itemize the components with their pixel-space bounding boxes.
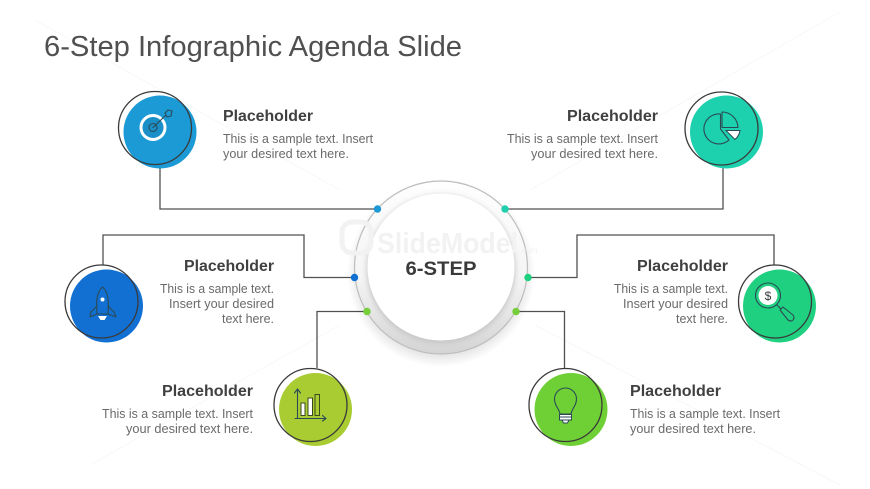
- text block: Placeholder: [184, 258, 274, 275]
- text block: Placeholder: [630, 383, 721, 400]
- text block: This is a sample text. Insert: [630, 406, 780, 421]
- center label: 6-STEP: [406, 258, 476, 280]
- text block: [507, 108, 658, 161]
- icon: pie chart: [685, 92, 763, 168]
- icon: magnifier: $: [765, 289, 772, 303]
- text block: This is a sample text.: [160, 281, 274, 296]
- icon: rocket: [65, 265, 143, 342]
- text block: Placeholder: [637, 258, 728, 275]
- step 3: rocket: [65, 258, 274, 342]
- text block: [630, 383, 780, 436]
- text block: Placeholder: [567, 108, 658, 125]
- text block: Placeholder: [223, 108, 313, 125]
- watermark: [342, 222, 538, 260]
- watermark: SlideModel: [377, 228, 518, 260]
- text block: text here.: [222, 311, 274, 326]
- icon: target: [118, 92, 196, 168]
- icon: light bulb: [529, 368, 608, 446]
- icon: bar chart: [274, 368, 352, 446]
- watermark: .com: [520, 246, 538, 255]
- connector lines: [103, 164, 774, 368]
- step 1: target: [118, 92, 373, 168]
- central circle: [342, 179, 538, 367]
- step 5: bar chart: [102, 368, 352, 446]
- text block: This is a sample text. Insert: [223, 131, 373, 146]
- text block: [160, 258, 274, 326]
- text block: your desired text here.: [531, 146, 658, 161]
- text block: text here.: [676, 311, 728, 326]
- text block: Insert your desired: [169, 296, 274, 311]
- text block: [102, 383, 253, 436]
- title: 6-Step Infographic Agenda Slide: [44, 31, 462, 63]
- step 6: light bulb: [529, 368, 780, 446]
- text block: Placeholder: [162, 383, 253, 400]
- text block: [614, 258, 728, 326]
- text block: This is a sample text. Insert: [507, 131, 658, 146]
- icon: magnifier: [738, 265, 816, 342]
- text block: your desired text here.: [223, 146, 349, 161]
- step 2: pie chart: [507, 92, 763, 168]
- text block: This is a sample text.: [614, 281, 728, 296]
- text block: Insert your desired: [623, 296, 728, 311]
- connector dots: [351, 205, 532, 315]
- step 4: magnifier: [614, 258, 816, 342]
- text block: your desired text here.: [126, 421, 253, 436]
- text block: your desired text here.: [630, 421, 756, 436]
- text block: This is a sample text. Insert: [102, 406, 253, 421]
- text block: [223, 108, 373, 161]
